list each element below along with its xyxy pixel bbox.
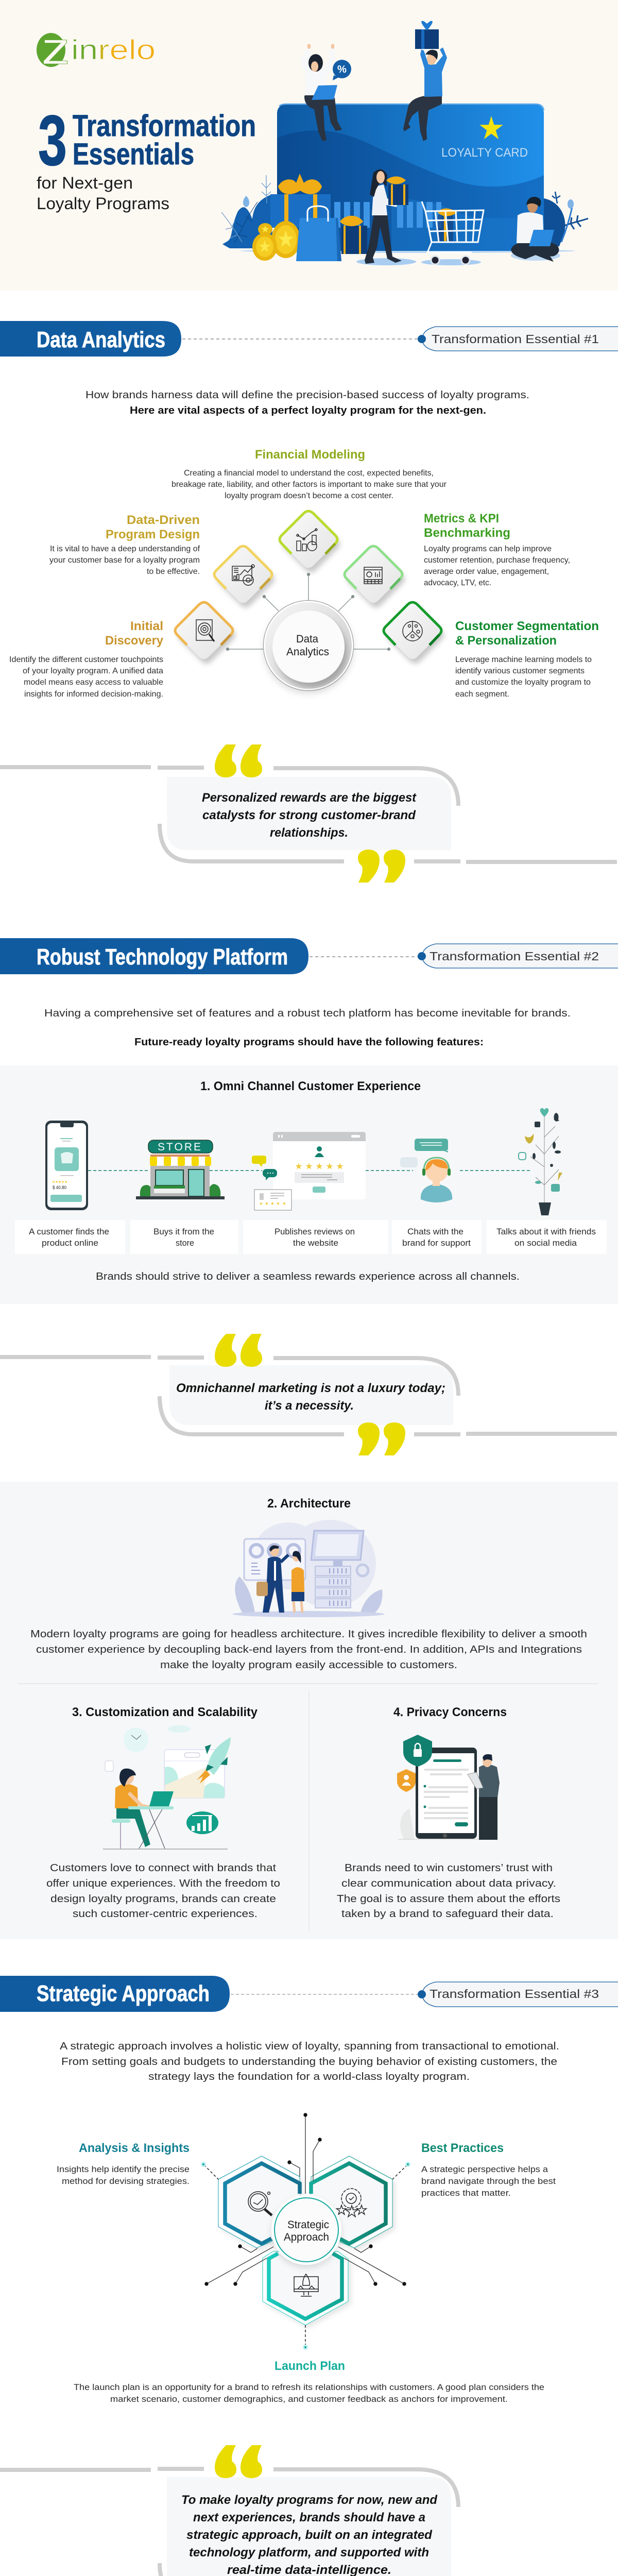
- text: best practices: [421, 2141, 556, 2198]
- text block: strategic intro: From setting goals and budgets to understanding the buying behavior of existing customers, the: [61, 2056, 557, 2067]
- dashed journey line: [88, 1170, 532, 1171]
- text: best practices: Best Practices: [421, 2141, 504, 2155]
- icon: social media tree: [519, 1108, 562, 1215]
- text: data-driven program design: your customer base for a loyalty program: [49, 556, 200, 565]
- text block: strategic intro: [60, 2041, 559, 2082]
- center circle: strategic approach: [271, 2195, 341, 2265]
- text: customer segmentation and personalization: [455, 619, 599, 699]
- section header: Robust Technology Platform: Robust Technology Platform: [37, 944, 288, 970]
- quote: personalized rewards: relationships.: [270, 826, 348, 840]
- closing line: Brands should strive to deliver a seamless rewards experience across all channels.: [96, 1271, 520, 1282]
- text: analysis and insights: Insights help identify the precise: [57, 2164, 190, 2174]
- logo: zinrelo: inrelo: [71, 35, 156, 65]
- text: customer segmentation and personalization: & Personalization: [455, 634, 557, 648]
- section header: Robust Technology Platform: Transformation Essential #2: [430, 950, 599, 963]
- architecture paragraph: make the loyalty program easily accessible to customers.: [160, 1659, 457, 1671]
- text: metrics and KPI benchmarking: Metrics & KPI: [424, 512, 499, 526]
- text: customization: such customer-centric experiences.: [73, 1908, 258, 1920]
- quote: make loyalty programs: next experiences, brands should have a: [193, 2511, 425, 2524]
- panel: omni channel customer experience: [0, 1065, 618, 1304]
- woman on card: %: [337, 64, 347, 75]
- woman walking: [365, 170, 408, 264]
- text: financial modeling: breakage rate, liability, and other factors is important to make sure that your: [171, 480, 447, 489]
- subtitle: Loyalty Programs: [37, 194, 169, 213]
- diamond: initial discovery: [175, 602, 233, 659]
- text: financial modeling: [171, 448, 447, 500]
- diamond: financial modeling: [280, 511, 337, 568]
- caption text: Buys it from the: [153, 1227, 214, 1236]
- caption text: Chats with the: [407, 1227, 464, 1236]
- hexagon: launch plan: [263, 2251, 348, 2325]
- man with gift: [403, 22, 447, 141]
- text: initial discovery: Initial: [130, 619, 163, 633]
- hexagon: best practices: [311, 2156, 392, 2248]
- quote: personalized rewards: [0, 744, 617, 883]
- quote: omnichannel marketing: it’s a necessity.: [265, 1399, 354, 1413]
- panel: data analytics diagram: [9, 448, 599, 699]
- diamond: metrics and KPI benchmarking: [345, 546, 402, 603]
- text block: strategic intro: strategy lays the foundation for a world-class loyalty program.: [148, 2071, 470, 2082]
- quote: make loyalty programs: [0, 2445, 617, 2576]
- caption text: Talks about it with friends: [496, 1227, 596, 1236]
- center circle: data analytics: [264, 601, 353, 690]
- subtitle: [37, 174, 169, 213]
- text: analysis and insights: [57, 2141, 190, 2186]
- panel: architecture, customization, privacy: [0, 1482, 618, 1939]
- illustration: loyalty card scene: [221, 22, 588, 265]
- text block: strategic intro: A strategic approach involves a holistic view of loyalty, spanning from transactional to emotional.: [60, 2041, 559, 2052]
- text: best practices: brand navigate through the best: [421, 2176, 556, 2186]
- architecture paragraph: [30, 1629, 587, 1671]
- text: data-driven program design: to be effective.: [147, 567, 200, 576]
- text: initial discovery: Identify the different customer touchpoints: [9, 655, 163, 664]
- section header: Data Analytics: [0, 321, 618, 357]
- logo: zinrelo: z: [41, 23, 70, 74]
- text: customization: Customers love to connect with brands that: [50, 1862, 277, 1874]
- diamond: data-driven program design: [214, 546, 272, 603]
- leaves right: [544, 192, 588, 248]
- subtitle: for Next-gen: [37, 174, 133, 192]
- text: launch plan: market scenario, customer demographics, and customer feedback as anchors for improvement.: [110, 2394, 508, 2404]
- shopping bag: [296, 206, 341, 261]
- icon: reviews on website: [252, 1132, 366, 1210]
- text: metrics and KPI benchmarking: Loyalty programs can help improve: [424, 545, 552, 553]
- architecture paragraph: customer experience by decoupling back-end layers from the front-end. In addition, APIs and Integrations: [36, 1644, 582, 1655]
- icon: phone with product: [45, 1121, 88, 1210]
- quote: personalized rewards: Personalized rewards are the biggest: [202, 791, 417, 805]
- hexagon: analysis and insights: [218, 2156, 300, 2248]
- title: 3 Transformation Essentials: Transformation: [73, 109, 256, 143]
- text: metrics and KPI benchmarking: Benchmarking: [424, 526, 510, 540]
- text: metrics and KPI benchmarking: [424, 512, 570, 587]
- card: [277, 104, 544, 251]
- illustration: privacy shields and phone: [397, 1735, 500, 1840]
- text: financial modeling: loyalty program doesn’t become a cost center.: [225, 492, 393, 500]
- text: customer segmentation and personalization: each segment.: [455, 690, 509, 699]
- text: customization: design loyalty programs, brands can create: [50, 1893, 276, 1905]
- shopping cart: [422, 201, 484, 264]
- text: metrics and KPI benchmarking: average order value, engagement,: [424, 567, 549, 576]
- text: privacy: [337, 1862, 560, 1920]
- section header: Strategic Approach: [0, 1976, 618, 2012]
- small gift: [340, 216, 367, 254]
- text block: data analytics intro: Here are vital aspects of a perfect loyalty program for the next-gen.: [130, 405, 486, 416]
- panel: strategic approach diagram: [57, 2113, 556, 2404]
- caption text: the website: [293, 1238, 338, 1248]
- text: analysis and insights: method for devising strategies.: [62, 2176, 190, 2186]
- text: analysis and insights: Analysis & Insights: [79, 2141, 190, 2155]
- connector lines: [202, 2113, 410, 2349]
- section header: Robust Technology Platform: [0, 938, 618, 974]
- title: 3 Transformation Essentials: Essentials: [73, 138, 194, 171]
- text: customer segmentation and personalization: Customer Segmentation: [455, 619, 599, 633]
- quote: omnichannel marketing: [0, 1334, 617, 1455]
- section header: Strategic Approach: Strategic Approach: [37, 1981, 210, 2006]
- center circle: data analytics: Analytics: [286, 646, 329, 658]
- gift with mask: [270, 174, 331, 228]
- section header: Data Analytics: Transformation Essential #1: [432, 332, 599, 346]
- text: privacy: clear communication about data privacy.: [341, 1878, 556, 1889]
- heading: architecture: 2. Architecture: [267, 1497, 351, 1511]
- quote: make loyalty programs: strategic approach, built on an integrated: [186, 2528, 433, 2542]
- heading: privacy: 4. Privacy Concerns: [393, 1705, 507, 1719]
- text: initial discovery: of your loyalty program. A unified data: [23, 667, 163, 675]
- text: metrics and KPI benchmarking: advocacy, LTV, etc.: [424, 579, 491, 587]
- quote: make loyalty programs: technology platform, and supported with: [189, 2546, 429, 2560]
- caption boxes: [15, 1220, 607, 1254]
- icon: phone with product: $ 40.80: [53, 1185, 66, 1190]
- text: launch plan: The launch plan is an opportunity for a brand to refresh its relationships with customers. A good plan considers the: [74, 2382, 544, 2392]
- text: customer segmentation and personalization: and customize the loyalty program to: [455, 678, 591, 687]
- center circle: data analytics: Data: [296, 633, 318, 645]
- caption text: A customer finds the: [29, 1227, 109, 1236]
- text: privacy: Brands need to win customers’ trust with: [345, 1862, 553, 1874]
- text: data-driven program design: It is vital to have a deep understanding of: [50, 545, 200, 553]
- leaves left: [221, 175, 273, 248]
- coins: [252, 221, 300, 261]
- bars: [334, 202, 441, 228]
- caption text: brand for support: [402, 1238, 471, 1248]
- text block: technology intro: Future-ready loyalty programs should have the following features:: [134, 1037, 484, 1048]
- text: data-driven program design: Data-Driven: [127, 513, 200, 527]
- diamond: customer segmentation: [384, 602, 441, 659]
- text: launch plan: Launch Plan: [274, 2359, 345, 2373]
- text block: technology intro: Having a comprehensive set of features and a robust tech platform has become inevitable for brands.: [44, 1008, 571, 1019]
- text: customization: offer unique experiences. With the freedom to: [46, 1878, 280, 1889]
- text: best practices: A strategic perspective helps a: [421, 2164, 548, 2174]
- text: initial discovery: model means easy access to valuable: [24, 678, 163, 687]
- caption text: Publishes reviews on: [274, 1227, 355, 1236]
- text: data-driven program design: Program Design: [106, 528, 200, 541]
- caption text: [29, 1227, 596, 1248]
- icon: store: STORE: [158, 1141, 201, 1153]
- illustration: loyalty card scene: LOYALTY CARD: [441, 146, 528, 160]
- text: initial discovery: insights for informed decision-making.: [24, 690, 163, 699]
- illustration: customization and rocket: [103, 1725, 231, 1850]
- connectors: [227, 573, 390, 650]
- center circle: strategic approach: Approach: [284, 2231, 329, 2243]
- architecture paragraph: Modern loyalty programs are going for headless architecture. It gives incredible flexibility to deliver a smooth: [30, 1629, 587, 1640]
- center circle: strategic approach: Strategic: [287, 2219, 329, 2231]
- text block: data analytics intro: [85, 389, 529, 416]
- text: privacy: taken by a brand to safeguard their data.: [341, 1908, 554, 1920]
- text: privacy: The goal is to assure them about the efforts: [337, 1893, 560, 1905]
- icon: support agent: [400, 1139, 452, 1202]
- text: data-driven program design: [49, 513, 200, 576]
- text block: data analytics intro: How brands harness data will define the precision-based success of loyalty programs.: [85, 389, 529, 401]
- man with laptop: [511, 197, 559, 262]
- logo: zinrelo: [37, 23, 156, 74]
- text: customization: [46, 1862, 280, 1920]
- section header: Data Analytics: Data Analytics: [37, 327, 165, 352]
- panel: hero header: [0, 0, 618, 291]
- heading: customization: 3. Customization and Scalability: [72, 1705, 258, 1719]
- title: 3 Transformation Essentials: 3: [38, 101, 67, 180]
- text: metrics and KPI benchmarking: customer retention, purchase frequency,: [424, 556, 570, 565]
- text: initial discovery: [9, 619, 164, 699]
- text: customer segmentation and personalization: Leverage machine learning models to: [455, 655, 592, 664]
- icon: store: [136, 1140, 225, 1199]
- quote: omnichannel marketing: Omnichannel marketing is not a luxury today;: [176, 1381, 445, 1395]
- text: initial discovery: Discovery: [105, 634, 164, 648]
- text: customer segmentation and personalization: identify various customer segments: [455, 667, 585, 675]
- text: financial modeling: Creating a financial model to understand the cost, expected benefits,: [184, 469, 434, 478]
- title: 3 Transformation Essentials: [38, 101, 256, 180]
- caption text: on social media: [514, 1238, 577, 1248]
- caption text: product online: [42, 1238, 98, 1248]
- woman on card: [300, 44, 351, 141]
- caption text: store: [176, 1238, 194, 1248]
- heading: 1. Omni Channel Customer Experience: [200, 1079, 421, 1093]
- text block: technology intro: [44, 1008, 571, 1048]
- illustration: architecture: [232, 1520, 385, 1617]
- text: financial modeling: Financial Modeling: [255, 448, 365, 462]
- section header: Strategic Approach: Transformation Essential #3: [430, 1987, 599, 2001]
- quote: make loyalty programs: To make loyalty programs for now, new and: [181, 2493, 438, 2507]
- quote: personalized rewards: catalysts for strong customer-brand: [202, 808, 416, 822]
- text: best practices: practices that matter.: [421, 2188, 511, 2198]
- text: launch plan: [74, 2359, 544, 2404]
